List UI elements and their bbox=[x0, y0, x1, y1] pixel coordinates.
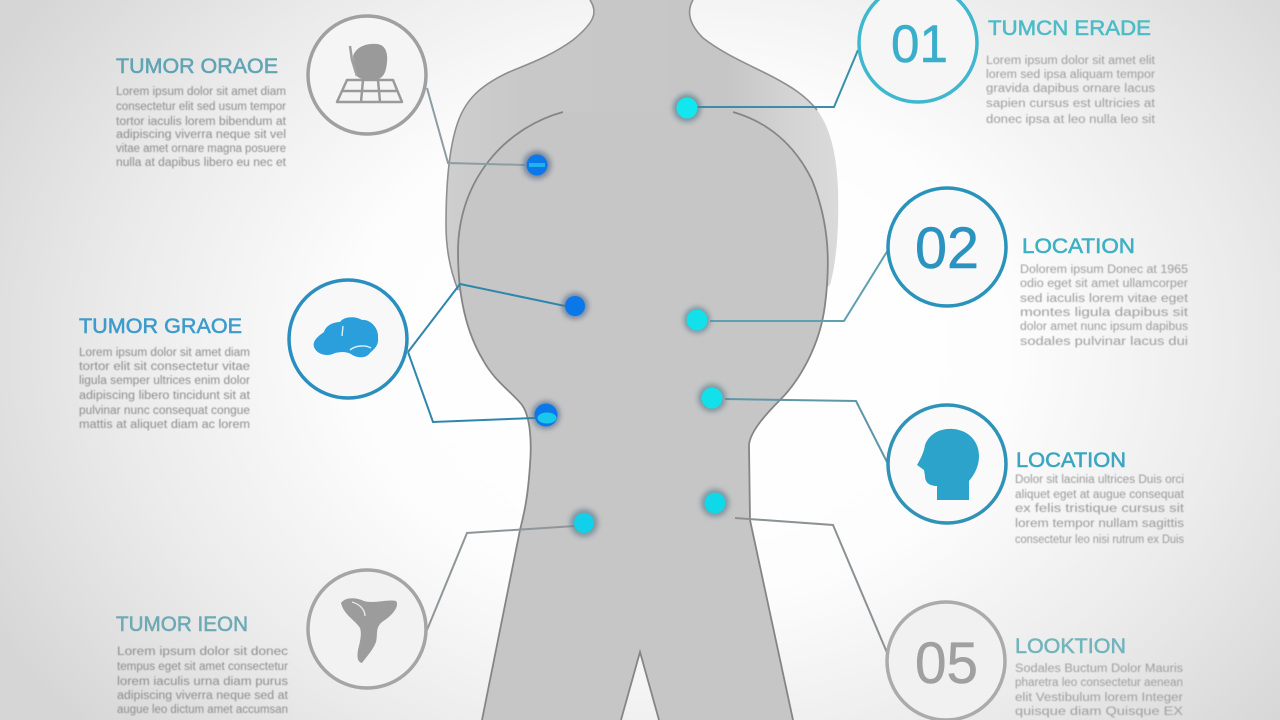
text block: description bbox=[117, 646, 289, 716]
text block: description bbox=[1015, 474, 1185, 546]
text block: description: gravida dapibus ornare lacus bbox=[986, 83, 1155, 95]
text block: description: tortor iaculis lorem bibendum at bbox=[116, 116, 287, 128]
text block: description: elit Vestibulum lorem Integer bbox=[1015, 692, 1183, 704]
text block: description: Lorem ipsum dolor sit amet diam bbox=[116, 86, 286, 98]
icon circle: brain bbox=[289, 280, 407, 398]
text block: description: adipiscing libero tincidunt sit at bbox=[79, 390, 251, 402]
icon circle: organ bbox=[308, 570, 426, 688]
text block: description: sodales pulvinar lacus dui bbox=[1020, 336, 1188, 348]
heading: tumor item: TUMOR IEON bbox=[116, 613, 248, 636]
text block: description: Lorem ipsum dolor sit amet diam bbox=[79, 347, 250, 359]
badge 02 bbox=[888, 188, 1006, 306]
panel: left bottom tumor item bbox=[116, 570, 426, 716]
text block: description: lorem sed ipsa aliquam tempor bbox=[986, 69, 1155, 81]
badge 05 bbox=[887, 602, 1005, 720]
text block: description: ligula semper ultrices enim dolor bbox=[79, 375, 250, 387]
heading: location: LOOKTION bbox=[1015, 635, 1126, 658]
text block: description: ex felis tristique cursus sit bbox=[1015, 503, 1185, 515]
connector lines bbox=[408, 50, 888, 655]
text block: description: quisque diam Quisque EX bbox=[1015, 706, 1183, 718]
heading: tumor grade: TUMCN ERADE bbox=[988, 17, 1151, 40]
text block: description: Lorem ipsum dolor sit amet elit bbox=[986, 55, 1156, 67]
heading: location: LOCATION bbox=[1022, 235, 1135, 258]
human body silhouette bbox=[446, 0, 838, 720]
badge 01: 01 bbox=[891, 15, 948, 74]
heading: tumor grade: TUMOR ORAOE bbox=[116, 55, 278, 78]
panel: right item head bbox=[888, 405, 1185, 546]
text block: description: pulvinar nunc consequat congue bbox=[79, 405, 250, 417]
text block: description: montes ligula dapibus sit bbox=[1020, 307, 1189, 319]
text block: description: Dolorem ipsum Donec at 1965 bbox=[1020, 264, 1188, 276]
text block: description: adipiscing viverra neque sed at bbox=[117, 690, 289, 702]
text block: description: odio eget sit amet ullamcorper bbox=[1020, 278, 1188, 290]
text block: description: sed iaculis lorem vitae eget bbox=[1020, 293, 1189, 305]
text block: description bbox=[1015, 663, 1183, 718]
heading: tumor grade: TUMOR GRAOE bbox=[79, 315, 242, 338]
text block: description bbox=[79, 347, 251, 431]
panel: left middle tumor grade bbox=[79, 280, 407, 431]
text block: description bbox=[1020, 264, 1189, 348]
text block: description: vitae amet ornare magna posuere bbox=[116, 143, 286, 155]
text block: description: sapien cursus est ultricies at bbox=[986, 98, 1156, 110]
badge 02: 02 bbox=[915, 216, 979, 281]
text block: description: dolor amet nunc ipsum dapibus bbox=[1020, 321, 1188, 333]
text block: description: lorem tempor nullam sagittis bbox=[1015, 518, 1184, 530]
text block: description: donec ipsa at leo nulla leo sit bbox=[986, 114, 1156, 126]
text block: description: nulla at dapibus libero eu nec et bbox=[116, 157, 287, 169]
badge 01 bbox=[859, 0, 977, 102]
panel: right item 01 bbox=[859, 0, 1156, 126]
text block: description bbox=[116, 86, 287, 169]
text block: description: consectetur leo nisi rutrum ex Duis bbox=[1015, 534, 1184, 546]
text block: description: mattis at aliquet diam ac lorem bbox=[79, 419, 250, 431]
text block: description: pharetra leo consectetur aenean bbox=[1015, 677, 1183, 689]
text block: description: tortor elit sit consectetur vitae bbox=[79, 361, 250, 373]
panel: right item 02 bbox=[888, 188, 1189, 348]
marker dots bbox=[523, 94, 729, 537]
text block: description: tempus eget sit amet consectetur bbox=[117, 661, 288, 673]
text block: description: augue leo dictum amet accumsan bbox=[117, 704, 288, 716]
badge 05: 05 bbox=[915, 631, 978, 696]
text block: description: consectetur elit sed usum tempor bbox=[116, 101, 286, 113]
text block: description bbox=[986, 55, 1156, 126]
icon circle: head bbox=[888, 405, 1006, 523]
text block: description: Sodales Buctum Dolor Mauris bbox=[1015, 663, 1183, 675]
panel: right item 05 bbox=[887, 602, 1183, 720]
text block: description: lorem iaculis urna diam purus bbox=[117, 676, 288, 688]
panel: left top tumor grade bbox=[116, 16, 426, 169]
text block: description: aliquet eget at augue consequat bbox=[1015, 489, 1185, 501]
icon circle: bed bbox=[308, 16, 426, 134]
text block: description: Lorem ipsum dolor sit donec bbox=[117, 646, 288, 658]
text block: description: adipiscing viverra neque sit vel bbox=[116, 129, 286, 141]
heading: location: LOCATION bbox=[1016, 449, 1126, 472]
text block: description: Dolor sit lacinia ultrices Duis orci bbox=[1015, 474, 1184, 486]
